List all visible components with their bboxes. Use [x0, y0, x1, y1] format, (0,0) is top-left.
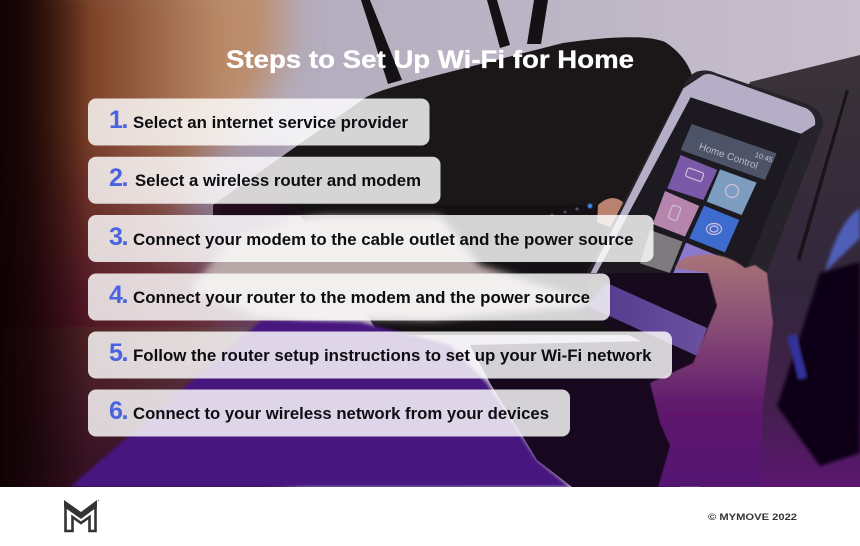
holding hand: [650, 255, 773, 487]
phone lower edge: [586, 273, 717, 336]
left dark edge: [0, 0, 90, 487]
logo: [64, 500, 99, 531]
antennas: [361, 0, 548, 84]
step 4: Connect your router to the modem and the power source: [133, 288, 590, 307]
step 3: [88, 215, 654, 262]
app tiles: [667, 155, 717, 200]
router lights: [551, 204, 592, 216]
phone, drawn in 3x zoom coordinates: 10:45: [754, 150, 774, 165]
copyright: © MYMOVE 2022: [708, 512, 797, 523]
step 6: [88, 390, 570, 436]
phone, drawn in 3x zoom coordinates: Home Control: [697, 141, 759, 172]
step 5: 5.: [109, 339, 128, 367]
step 1: 1.: [109, 106, 128, 134]
step 4: [88, 274, 610, 320]
title: Steps to Set Up Wi-Fi for Home: [226, 46, 634, 74]
step 6: Connect to your wireless network from your devices: [133, 404, 549, 423]
step 3: 3.: [109, 223, 128, 251]
dark area under phone: [470, 340, 700, 487]
left lower maroon tint: [22, 146, 304, 487]
right dark device: [777, 262, 860, 466]
router: [213, 37, 692, 205]
step 1: Select an internet service provider: [133, 113, 408, 132]
tile glyphs: [668, 168, 738, 234]
phone, drawn in 3x zoom coordinates: [587, 70, 823, 363]
step 2: [88, 157, 440, 204]
foreground blurred hand: [190, 216, 600, 320]
step 5: [88, 332, 672, 378]
step 3: Connect your modem to the cable outlet and the power source: [133, 230, 634, 249]
monitor behind phone: [700, 55, 860, 487]
screen header: [681, 124, 777, 180]
step 2: 2.: [109, 164, 128, 192]
step 2: Select a wireless router and modem: [135, 171, 421, 190]
step 5: Follow the router setup instructions to set up your Wi-Fi network: [133, 346, 652, 365]
step 1: [88, 98, 430, 146]
fingertip on phone edge: [597, 198, 624, 228]
footer band: [0, 487, 860, 546]
blurred arm and shoulder: [0, 0, 285, 500]
purple sleeve: [70, 320, 570, 487]
step 6: 6.: [109, 397, 128, 425]
step 4: 4.: [109, 281, 128, 309]
